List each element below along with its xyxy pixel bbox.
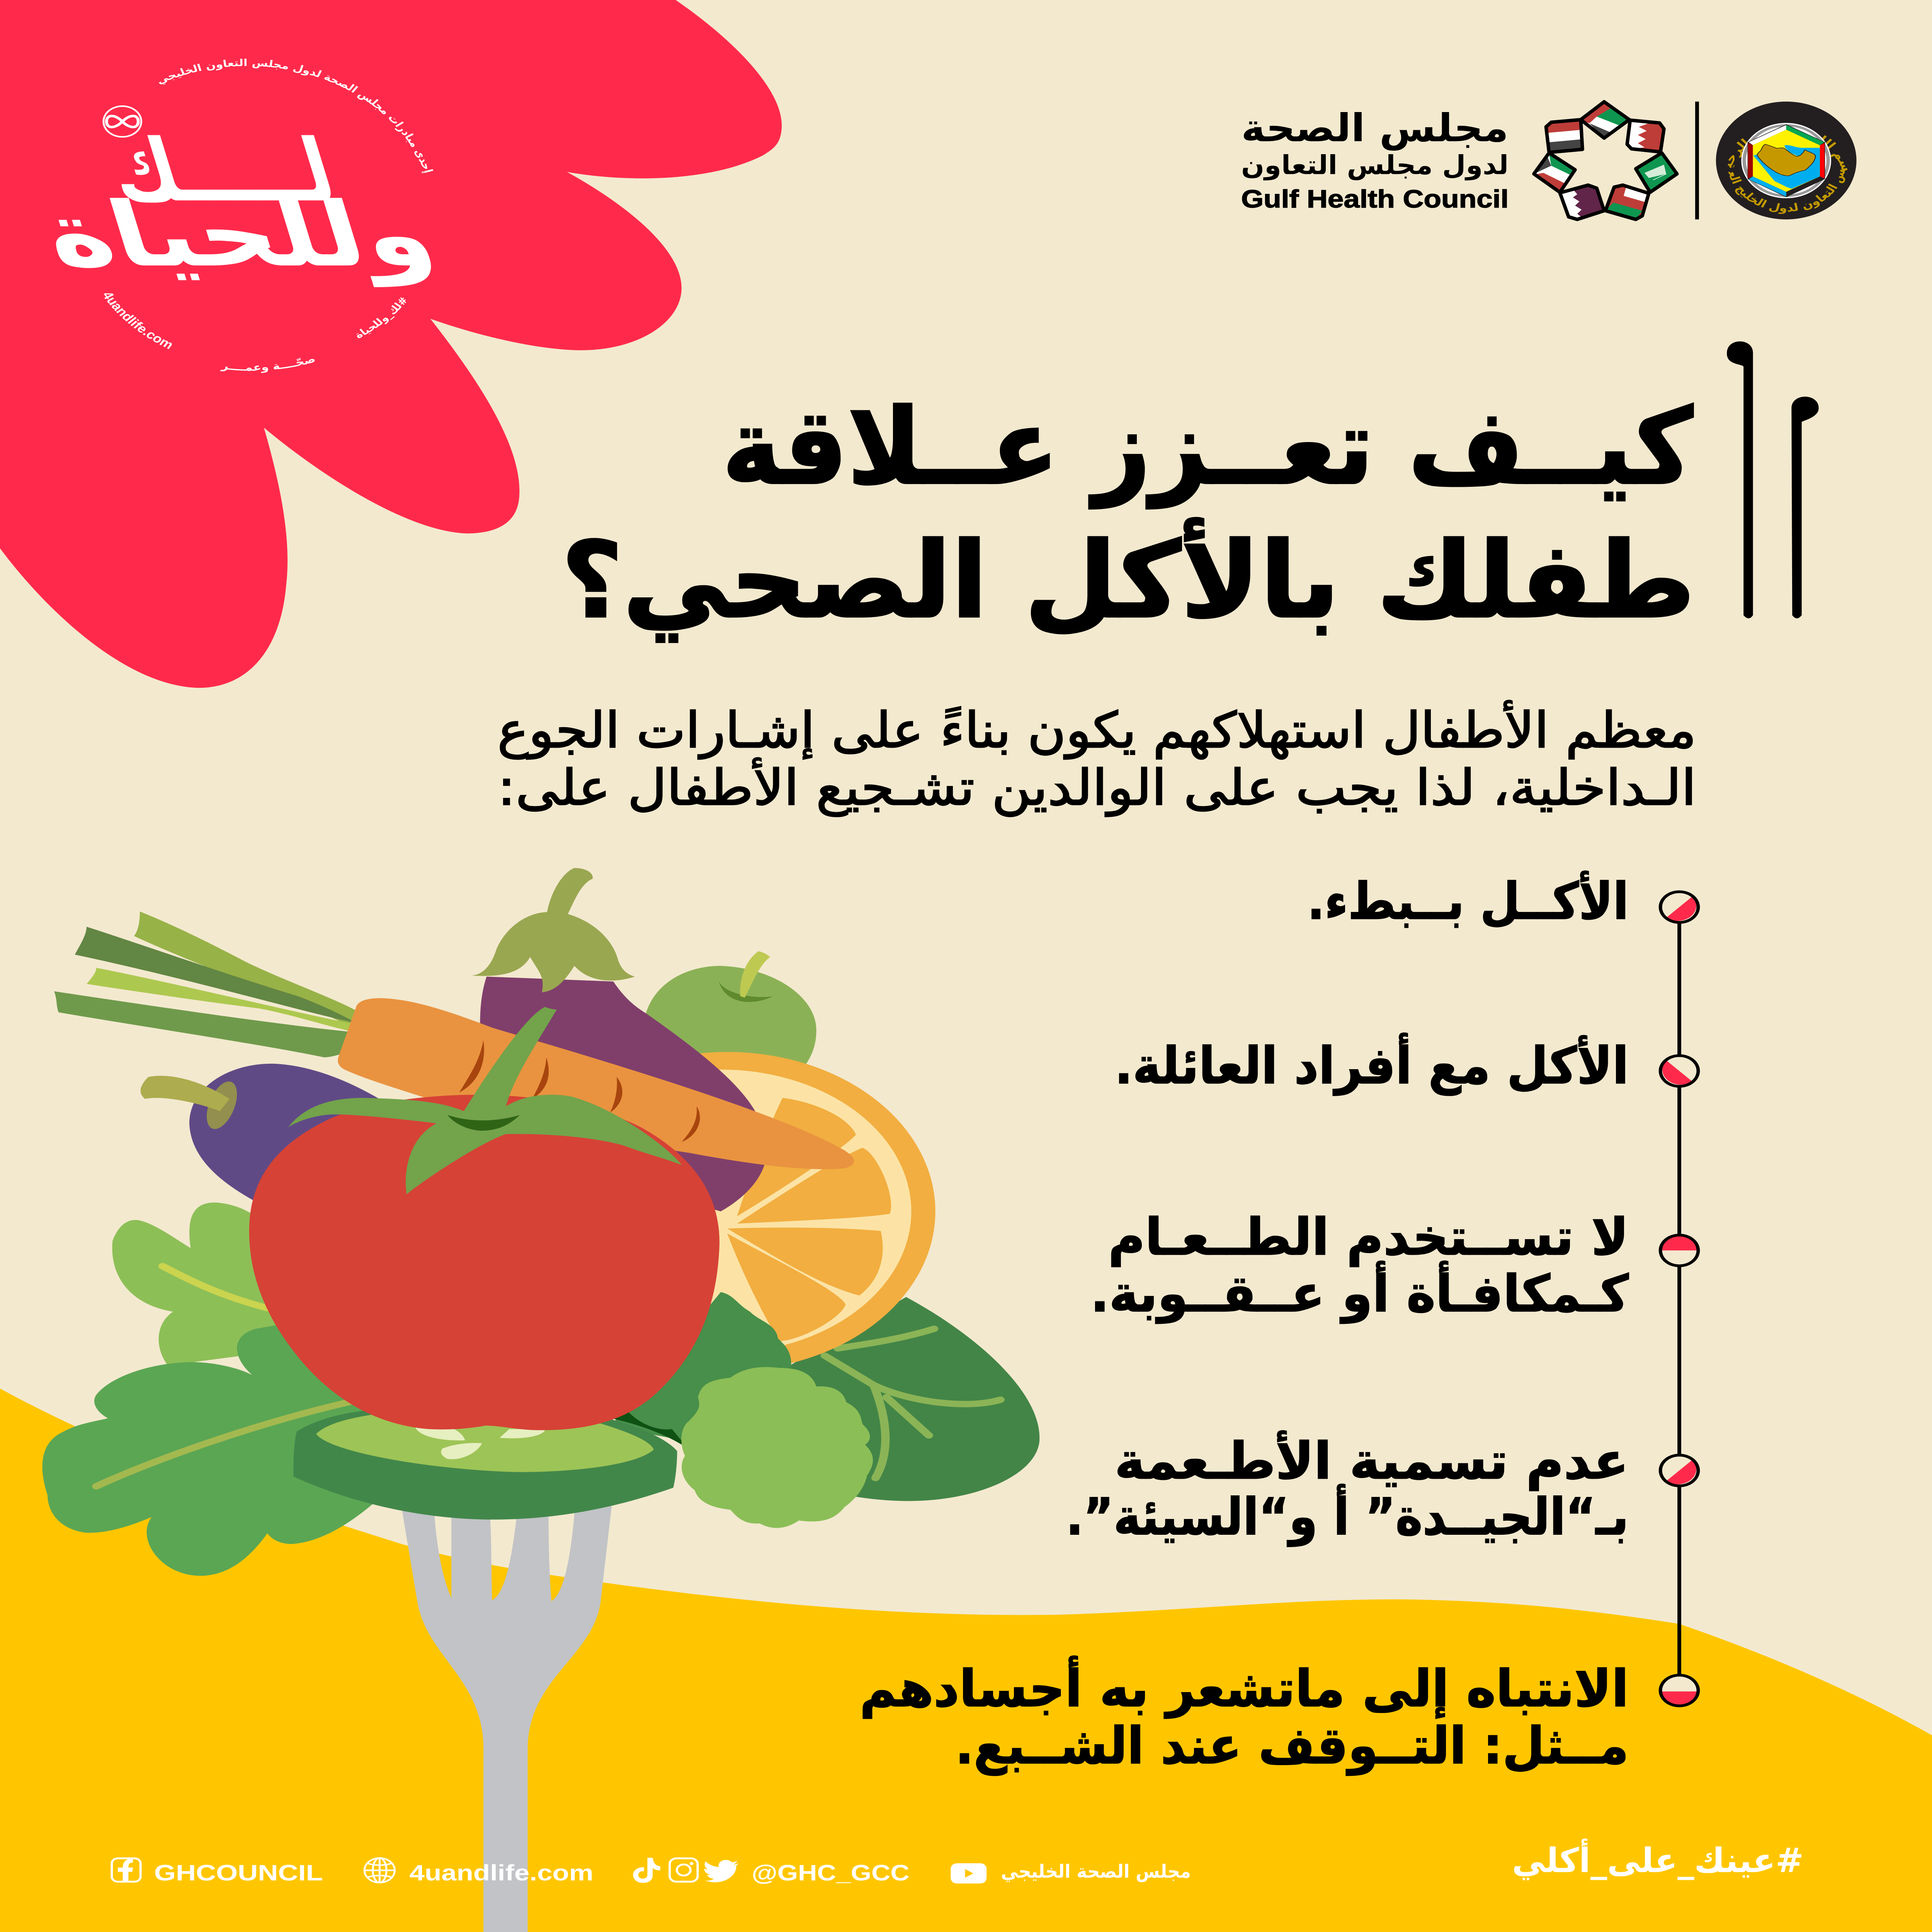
timeline dot three xyxy=(1660,1235,1698,1266)
tip three: لا تســتخدم الطــعـام xyxy=(1108,1208,1629,1267)
flag: Yemen xyxy=(1546,120,1582,152)
tip five: مــثل: التــوقف عند الشــبع. xyxy=(955,1716,1629,1776)
flag: Qatar xyxy=(1560,185,1604,219)
icon: globe xyxy=(364,1858,395,1883)
orange slice xyxy=(519,1052,935,1371)
light broccoli xyxy=(681,1367,873,1528)
hashtag: #عينك_على_أكلي xyxy=(1512,1838,1804,1881)
handle: @GHC_GCC: @GHC_GCC xyxy=(752,1861,910,1885)
flag: Bahrain xyxy=(1627,120,1664,152)
campaign logo xyxy=(31,57,447,373)
council name english: Gulf Health Council xyxy=(1241,185,1509,213)
big dark leaf xyxy=(753,1297,1039,1501)
flag: Saudi Arabia xyxy=(1636,153,1677,192)
yellow wave xyxy=(0,1389,1932,1932)
fork xyxy=(399,1492,613,1932)
GCC seal xyxy=(0,0,1856,219)
mid green leaf xyxy=(43,1321,428,1576)
council subtitle arabic: لدول مجلس التعاون xyxy=(1241,150,1509,180)
timeline line xyxy=(1677,907,1681,1690)
icon: six flags star xyxy=(1534,102,1677,219)
tip two: الأكل مع أفراد العائلة. xyxy=(1115,1032,1629,1095)
icon: youtube xyxy=(951,1863,986,1884)
title xyxy=(561,386,1695,643)
flag: Kuwait xyxy=(1534,153,1575,192)
website: 4uandlife.com xyxy=(410,1861,594,1885)
icon: infinity circle xyxy=(104,106,141,137)
timeline dot two xyxy=(1660,1056,1698,1086)
timeline dot one xyxy=(1660,892,1698,922)
eggplant xyxy=(472,868,767,1211)
logo ring text: website: 4uandlife.com xyxy=(99,289,176,352)
flag: UAE xyxy=(1581,102,1629,138)
timeline dot four xyxy=(1660,1455,1698,1486)
red flower shape xyxy=(0,0,782,688)
tip three: كـمكافـأة أو عــقــوبة. xyxy=(1090,1260,1629,1324)
tip five: الانتباه إلى ماتشعر به أجسادهم xyxy=(860,1655,1629,1719)
logo wordmark line two: وللحياة xyxy=(31,183,447,288)
council logo: name text xyxy=(1241,106,1509,213)
carrot xyxy=(338,998,854,1169)
intro line one: معظم الأطفال استهلاكهم يكون بناءً على إشـارات الجوع xyxy=(497,700,1696,759)
icon: tiktok xyxy=(633,1858,660,1883)
tomato xyxy=(249,1007,719,1430)
logo ring text: hashtag: #لك_وللحياة xyxy=(352,295,411,341)
green apple xyxy=(646,951,816,1070)
seal disc xyxy=(1716,102,1856,219)
timeline dot five xyxy=(1660,1675,1698,1707)
icon: facebook xyxy=(112,1858,141,1882)
light green leaf xyxy=(112,1202,298,1366)
tip one: الأكــل بــبطء. xyxy=(1307,871,1629,931)
tip four: بـ“الجيــدة” أ و“السيئة”. xyxy=(1066,1484,1629,1547)
purple plum xyxy=(141,1064,379,1211)
carrot greens xyxy=(54,912,373,1057)
tip four xyxy=(1066,1430,1629,1547)
intro paragraph xyxy=(497,700,1696,816)
title line two: طفلك بالأكل الصحي؟ xyxy=(561,517,1695,643)
seal emblem xyxy=(1741,123,1831,198)
icon: instagram xyxy=(670,1858,697,1882)
handle: GHCOUNCIL: GHCOUNCIL xyxy=(154,1861,323,1885)
footer social bar xyxy=(112,1838,1804,1885)
icon: title fork strokes xyxy=(1727,341,1819,618)
tip three xyxy=(1090,1208,1629,1324)
intro line two: الـداخلية، لذا يجب على الوالدين تشـجيع الأطفال على: xyxy=(497,758,1696,816)
logo ring text: tagline: صحّــــة وعمــــر xyxy=(220,353,317,373)
channel name: مجلس الصحة الخليجي xyxy=(1001,1861,1191,1882)
illustration: vegetables on fork xyxy=(43,868,1039,1576)
tips list xyxy=(860,871,1629,1776)
tip five xyxy=(860,1655,1629,1776)
council name arabic: مجلس الصحة xyxy=(1241,106,1509,150)
logo ring text: initiative: إحدى مبادرات مجلس الصحة لدول مجلس التعاون الخليجي xyxy=(154,57,435,174)
dark broccoli xyxy=(604,1292,791,1449)
tip four: عدم تسمية الأطـعمة xyxy=(1115,1430,1629,1491)
cucumber slice xyxy=(293,1407,677,1520)
icon: twitter xyxy=(704,1860,738,1882)
flag: Oman xyxy=(1605,185,1649,219)
logo divider xyxy=(1695,102,1699,219)
logo wordmark line one: لـــــك xyxy=(96,121,346,221)
